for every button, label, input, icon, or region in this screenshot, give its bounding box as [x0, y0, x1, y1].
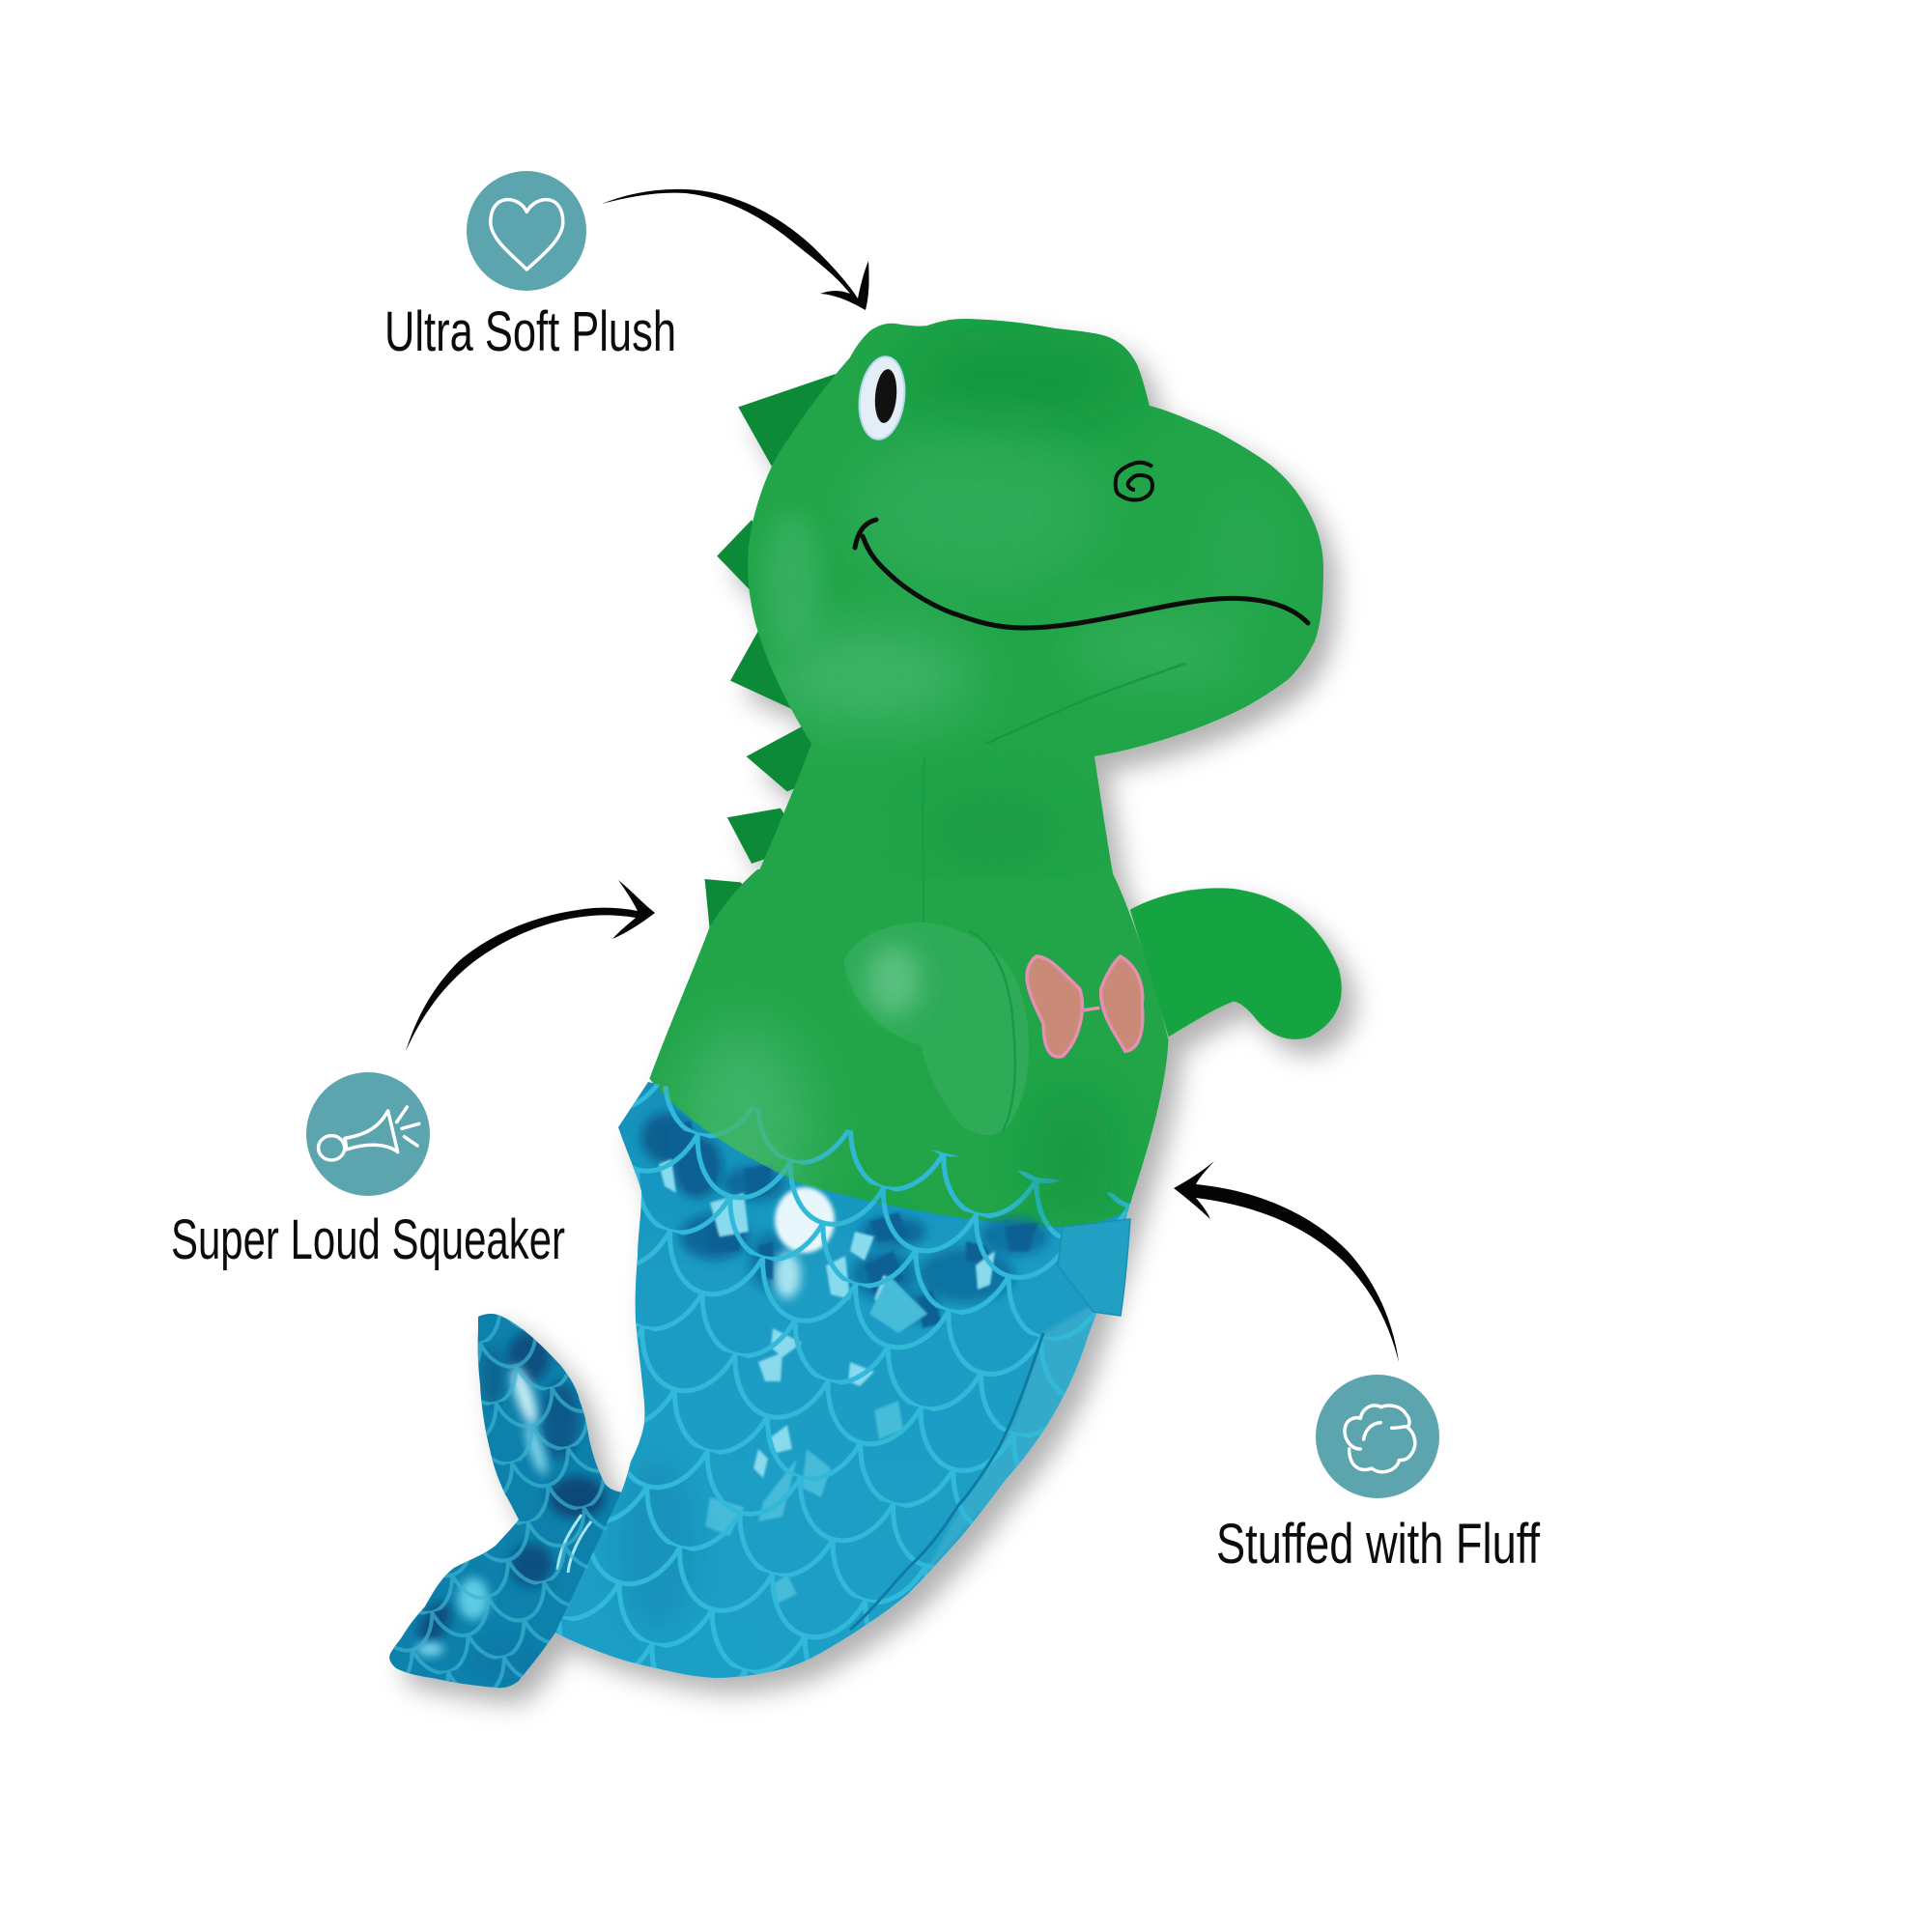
green torso — [649, 869, 1169, 1228]
neck seam — [923, 756, 924, 966]
left arm — [844, 923, 1029, 1135]
plush shading on torso — [655, 1016, 1130, 1227]
arrow to body — [1174, 1161, 1399, 1362]
tail fin — [389, 1314, 623, 1688]
toy silhouette with shadow — [389, 319, 1342, 1688]
label: super loud squeaker: Super Loud Squeaker — [171, 1208, 565, 1271]
side flap fin — [1058, 1219, 1130, 1316]
white highlight — [775, 1187, 835, 1253]
tail fin details — [393, 1315, 611, 1689]
shell bra embroidery — [1027, 956, 1143, 1057]
pale side panel past the seam — [928, 1307, 1095, 1573]
shards — [659, 1121, 1038, 1604]
holographic scales on tail body — [556, 1084, 1130, 1677]
side seam — [850, 1333, 1043, 1630]
plush toy: dinosaur mermaid — [377, 319, 1342, 1700]
darker scale shading at lower left — [621, 1467, 690, 1625]
dark shimmer patches — [641, 1113, 692, 1163]
scale pattern — [556, 1084, 1130, 1677]
arrow to back — [406, 880, 655, 1051]
feature: super loud squeaker — [171, 880, 655, 1271]
face — [855, 355, 1308, 966]
feature: stuffed with fluff — [1174, 1161, 1541, 1576]
nostril — [1116, 463, 1152, 500]
plush shading on head — [761, 319, 1223, 846]
eye — [855, 355, 909, 441]
back spikes — [705, 374, 836, 927]
smile — [855, 520, 1308, 628]
label: ultra soft plush: Ultra Soft Plush — [384, 300, 676, 363]
icon: horn in teal circle — [306, 1072, 430, 1196]
label: stuffed with fluff: Stuffed with Fluff — [1216, 1513, 1541, 1576]
icon: heart in teal circle — [467, 171, 586, 291]
mermaid tail body — [555, 1082, 1132, 1678]
arrow to head — [602, 189, 869, 310]
feature: ultra soft plush — [384, 171, 869, 363]
right arm — [1130, 888, 1342, 1039]
icon: cloud of fluff in teal circle — [1316, 1375, 1439, 1498]
chin seam — [985, 664, 1185, 744]
green head and neck — [748, 319, 1323, 879]
